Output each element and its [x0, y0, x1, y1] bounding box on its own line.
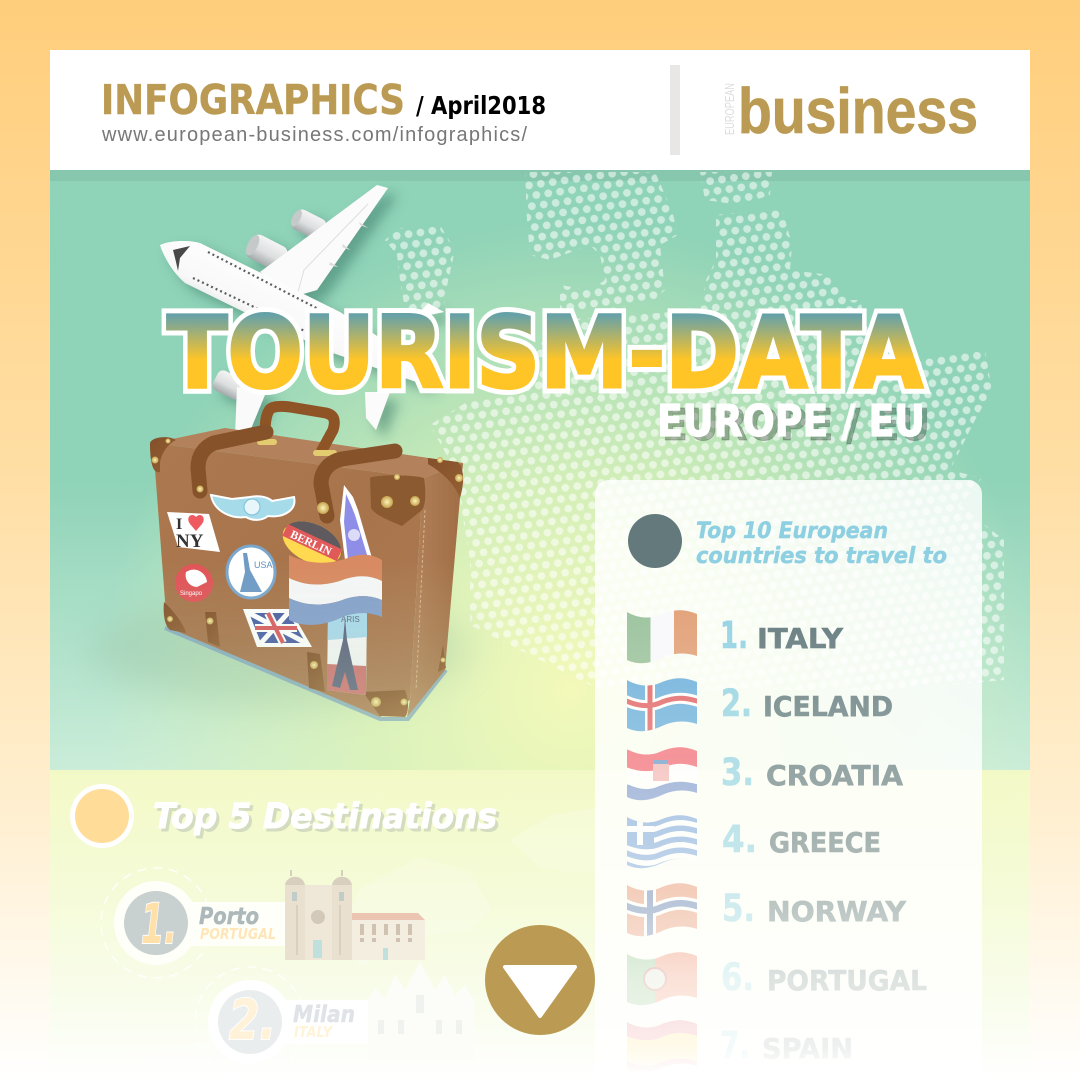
sticker: i love ny: I — [176, 516, 182, 533]
flag: netherlands — [289, 555, 382, 625]
destination 2: milan: 2. — [229, 988, 276, 1052]
sticker: big ben — [340, 485, 372, 560]
section heading: top 5 destinations: Top 5 Destinations — [156, 800, 500, 840]
item 6: portugal — [627, 952, 926, 1006]
subtitle: europe / eu: EUROPE / EU — [662, 400, 930, 451]
item 7: spain: 7. — [720, 1024, 750, 1067]
suitcase handle — [265, 406, 334, 452]
logo: european business: EUROPEAN — [722, 83, 737, 135]
item 5: norway: 5. — [722, 887, 755, 930]
item 4: greece: GREECE — [769, 827, 881, 859]
title: tourism-data: TOURISM-DATA — [167, 296, 923, 411]
destination 2: milan: ITALY — [294, 1023, 334, 1041]
airplane — [160, 185, 444, 436]
hero background — [50, 170, 1030, 770]
heading: infographics: INFOGRAPHICS — [101, 76, 405, 124]
suitcase top face — [153, 428, 463, 478]
item 3: croatia: 3. — [721, 751, 754, 794]
sticker: paris — [327, 610, 367, 695]
windows — [193, 252, 330, 343]
panel heading: top 10: countries to travel to — [696, 544, 947, 569]
item 4: greece — [627, 815, 880, 868]
lower wing — [235, 387, 267, 436]
milan cathedral — [368, 962, 474, 1060]
sticker: singapore: Singapo — [180, 591, 203, 597]
ribbon — [284, 1000, 368, 1044]
rivets — [152, 438, 463, 707]
faint map in lower section — [120, 807, 600, 1080]
title: tourism-data: TOURISM-DATA — [167, 296, 923, 411]
sticker: i love ny — [167, 512, 220, 552]
suitcase — [150, 406, 463, 719]
tail plane — [365, 303, 444, 430]
suitcase base edge — [165, 628, 446, 719]
panel: top 10 countries background — [595, 480, 982, 1080]
panel heading: top 10: Top 10 European — [696, 519, 888, 544]
cockpit — [173, 246, 190, 271]
suitcase side face — [407, 463, 463, 717]
arrow: scroll down — [485, 925, 595, 1035]
item 7: spain: SPAIN — [762, 1033, 853, 1065]
sticker: berlin: BERLIN — [288, 529, 334, 559]
front right corner guard — [370, 475, 425, 526]
heading badge — [70, 784, 134, 848]
section heading: top 5 destinations: Top 5 Destinations — [153, 797, 497, 837]
top back right corner guard — [428, 458, 463, 498]
right strap — [321, 451, 395, 516]
porto building — [352, 913, 425, 960]
date: / April2018 — [416, 91, 546, 120]
left strap — [198, 432, 266, 491]
item 1: italy — [627, 610, 844, 664]
top left corner guard — [150, 437, 176, 472]
sticker: paris: ARIS — [341, 615, 360, 624]
sticker: berlin — [282, 521, 342, 563]
destination 2: milan — [195, 962, 474, 1077]
item 7: spain — [627, 1020, 851, 1063]
masked content group — [150, 406, 927, 1078]
item 3: croatia — [627, 747, 904, 800]
upper wing — [260, 185, 388, 296]
destination 1: porto: PORTUGAL — [200, 925, 276, 943]
item 2: iceland: ICELAND — [763, 691, 893, 723]
sticker: usa: USA — [254, 560, 273, 570]
lower section background — [50, 770, 1030, 1080]
item 4: greece: 4. — [722, 818, 757, 861]
fuselage — [160, 241, 430, 385]
sticker: singapore — [175, 564, 213, 602]
item 3: croatia: CROATIA — [766, 760, 904, 792]
item 1: italy: 1. — [720, 614, 748, 657]
suitcase front face — [153, 443, 423, 717]
suitcase ground shadow — [90, 595, 470, 705]
destination 1: porto — [101, 868, 425, 978]
item 6: portugal: PORTUGAL — [767, 965, 927, 997]
item 2: iceland — [627, 678, 892, 732]
item 5: norway: NORWAY — [767, 896, 907, 928]
porto cathedral — [285, 870, 352, 960]
heading badge — [628, 514, 682, 568]
header bar — [50, 50, 1030, 170]
bottom corner guards — [164, 602, 446, 717]
website url: www.european-business.com/infographics/ — [101, 124, 527, 146]
section heading: top 5 destinations — [70, 784, 500, 848]
ribbon — [190, 902, 286, 946]
logo: european business: business — [738, 75, 978, 147]
item 1: italy: ITALY — [757, 623, 844, 655]
item 2: iceland: 2. — [721, 682, 752, 725]
ranking list — [624, 608, 927, 1078]
panel heading: top 10 — [628, 514, 947, 569]
sticker: usa — [227, 546, 275, 598]
destination 1: porto: 1. — [141, 892, 177, 956]
dotted map of europe — [385, 172, 1004, 690]
sticker: wings — [211, 495, 294, 520]
subtitle: europe / eu: EUROPE / EU — [657, 396, 925, 447]
sticker: i love ny: NY — [176, 531, 204, 552]
destination 1: porto: Porto — [199, 904, 259, 930]
lower engine — [210, 368, 247, 402]
upper engines — [243, 207, 328, 273]
destination 2: milan: Milan — [293, 1002, 355, 1028]
item 5: norway — [627, 883, 907, 936]
item 6: portugal: 6. — [721, 956, 754, 999]
sticker: union jack — [243, 609, 312, 647]
handle clasps — [257, 439, 337, 456]
